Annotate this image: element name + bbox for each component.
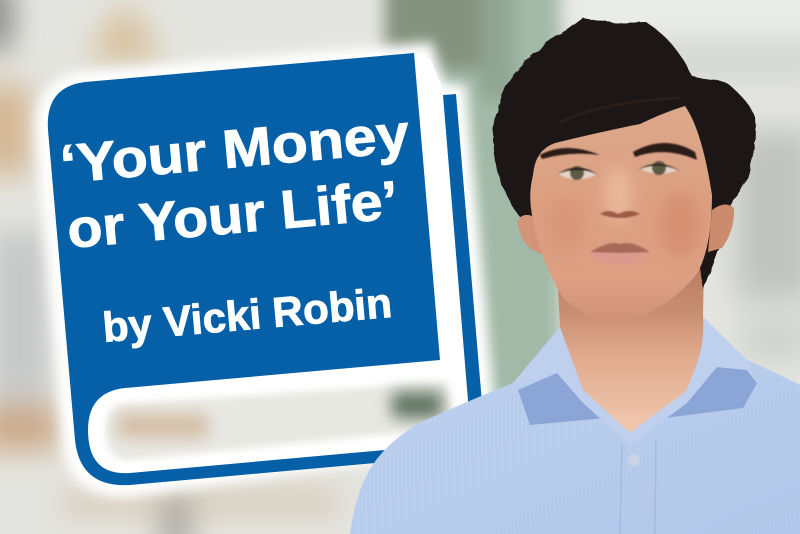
shirt weave: [350, 360, 800, 534]
neck: [558, 262, 704, 433]
right ear: [708, 204, 734, 252]
hair strands: [560, 98, 680, 122]
shirt collar: [513, 317, 757, 445]
right collar inner: [665, 367, 757, 418]
person: [350, 18, 800, 534]
title line 2: or Your Life’: [65, 170, 401, 260]
eyes: [556, 161, 680, 180]
book halo: [35, 42, 494, 497]
shirt button: [628, 454, 640, 466]
lips: [590, 243, 650, 265]
book: [35, 42, 494, 497]
left ear: [517, 215, 545, 255]
book page: [80, 53, 482, 480]
book page opening: [106, 382, 452, 460]
face: [530, 106, 712, 325]
shirt placket: [620, 440, 656, 534]
author: by Vicki Robin: [101, 279, 394, 351]
right collar stand: [630, 317, 757, 445]
blurred reflections in page opening: [118, 392, 442, 438]
left collar stand: [513, 327, 630, 445]
left collar inner: [518, 373, 605, 425]
book back edge: [443, 94, 482, 425]
eyebrows: [540, 143, 697, 160]
book cover: [48, 53, 440, 485]
shirt: [350, 317, 800, 534]
hair behind: [493, 18, 755, 290]
book title: [58, 103, 412, 351]
cheek shading: [547, 167, 700, 257]
title line 1: ‘Your Money: [58, 103, 412, 195]
nose: [600, 211, 640, 218]
